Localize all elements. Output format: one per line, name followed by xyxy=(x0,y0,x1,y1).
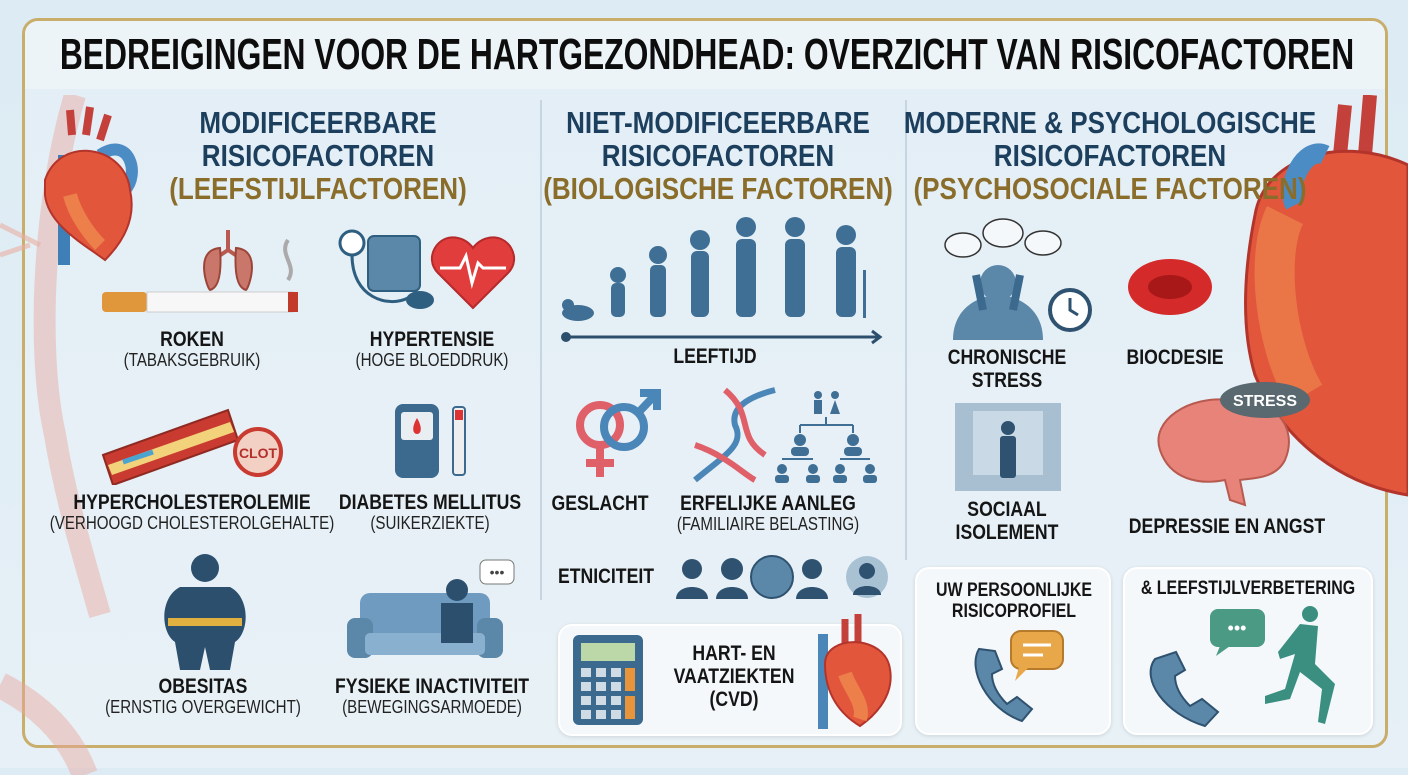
label: hart- en vaatziekten: HART- EN xyxy=(692,642,776,665)
icon: brain with stress cloud xyxy=(1157,382,1310,506)
icon: ethnicity heads xyxy=(676,555,888,599)
label: uw persoonlijke risicoprofiel: UW PERSOONLIJKE xyxy=(936,580,1092,601)
column 1 heading: (LEEFSTIJLFACTOREN) xyxy=(169,171,467,206)
label: sociaal isolement xyxy=(956,498,1058,544)
icon: phone and bubble xyxy=(974,630,1064,722)
icon: blood cell xyxy=(1128,259,1212,315)
icon: artery with clot xyxy=(102,408,283,485)
label: obesitas: (ERNSTIG OVERGEWICHT) xyxy=(105,697,301,717)
icon: couch: ••• xyxy=(490,564,504,580)
column 2 heading: (BIOLOGISCHE FACTOREN) xyxy=(543,171,893,206)
panel: leefstijlverbetering xyxy=(1123,567,1373,735)
label: roken xyxy=(124,328,260,370)
icon: phone, chat and runner xyxy=(1150,606,1335,728)
label: hypercholesterolemie: (VERHOOGD CHOLESTEROLGEHALTE) xyxy=(50,513,334,533)
icon: brain with stress cloud: STRESS xyxy=(1233,393,1297,410)
label: hart- en vaatziekten: (CVD) xyxy=(710,688,758,711)
icon: calculator xyxy=(573,635,643,725)
label: etniciteit: ETNICITEIT xyxy=(558,565,654,588)
icon: stress head xyxy=(944,218,1092,340)
decoration: right heart xyxy=(1244,95,1408,496)
label: hart- en vaatziekten xyxy=(674,642,794,711)
label: diabetes: (SUIKERZIEKTE) xyxy=(370,513,490,533)
icon: obese person xyxy=(164,554,246,670)
label: chronische stress: CHRONISCHE xyxy=(948,346,1066,369)
label: hypertensie: (HOGE BLOEDDRUK) xyxy=(356,350,508,370)
panel: cvd calculator xyxy=(558,624,902,736)
label: sociaal isolement: SOCIAAL xyxy=(967,498,1047,521)
label: uw persoonlijke risicoprofiel: RISICOPROFIEL xyxy=(952,601,1076,622)
label: hypertensie: HYPERTENSIE xyxy=(370,328,494,351)
icon: social isolation room xyxy=(955,403,1061,491)
icon: age progression xyxy=(561,217,882,344)
label: diabetes: DIABETES MELLITUS xyxy=(339,491,521,514)
label: uw persoonlijke risicoprofiel xyxy=(936,580,1092,622)
label: hart- en vaatziekten: VAATZIEKTEN xyxy=(674,665,794,688)
column dividers xyxy=(540,100,542,600)
column 2 heading: NIET-MODIFICEERBARE xyxy=(566,105,870,140)
label: erfelijke aanleg: (FAMILIAIRE BELASTING) xyxy=(677,514,859,534)
label: roken: (TABAKSGEBRUIK) xyxy=(124,350,260,370)
label: biocdesie: BIOCDESIE xyxy=(1126,346,1224,369)
column 3 heading: MODERNE & PSYCHOLOGISCHE xyxy=(904,105,1316,140)
icon: glucose meter xyxy=(395,404,466,478)
column 1 heading xyxy=(169,105,467,206)
label: obesitas xyxy=(105,675,301,717)
label: hypertensie xyxy=(356,328,508,370)
label: obesitas: OBESITAS xyxy=(159,675,247,698)
icon: blood pressure and heart xyxy=(338,230,516,310)
column 2 heading: RISICOFACTOREN xyxy=(602,138,834,173)
label: roken: ROKEN xyxy=(160,328,224,351)
label: fysieke inactiviteit: FYSIEKE INACTIVITEIT xyxy=(335,675,529,698)
icon: dna and family tree xyxy=(693,387,877,483)
column 2 heading xyxy=(543,105,893,206)
label: fysieke inactiviteit xyxy=(335,675,529,717)
title band xyxy=(25,21,1385,89)
icon: couch xyxy=(347,560,514,658)
label: erfelijke aanleg: ERFELIJKE AANLEG xyxy=(680,492,856,515)
label: diabetes xyxy=(339,491,521,533)
label: hypercholesterolemie xyxy=(50,491,334,533)
panel: persoonlijke risicoprofiel xyxy=(915,567,1111,735)
icon: gender symbols xyxy=(576,389,661,477)
label: erfelijke aanleg xyxy=(677,492,859,534)
title: BEDREIGINGEN VOOR DE HARTGEZONDHEAD: OVERZICHT VAN RISICOFACTOREN xyxy=(60,30,1354,79)
decoration: left heart and vessel xyxy=(0,95,138,775)
icon: phone, chat and runner: ••• xyxy=(1228,618,1246,638)
label: leefstijlverbetering: & LEEFSTIJLVERBETERING xyxy=(1141,578,1355,599)
column 3 heading xyxy=(904,105,1316,206)
label: leeftijd: LEEFTIJD xyxy=(673,345,757,368)
label: depressie en angst: DEPRESSIE EN ANGST xyxy=(1129,515,1325,538)
label: fysieke inactiviteit: (BEWEGINGSARMOEDE) xyxy=(342,697,522,717)
icon: heart xyxy=(818,614,892,729)
column 3 heading: (PSYCHOSOCIALE FACTOREN) xyxy=(913,171,1307,206)
label: geslacht: GESLACHT xyxy=(551,492,649,515)
label: chronische stress xyxy=(948,346,1066,392)
label: hypercholesterolemie: HYPERCHOLESTEROLEMIE xyxy=(73,491,311,514)
column 1 heading: MODIFICEERBARE xyxy=(199,105,437,140)
column 3 heading: RISICOFACTOREN xyxy=(994,138,1226,173)
label: chronische stress: STRESS xyxy=(972,369,1042,392)
label: sociaal isolement: ISOLEMENT xyxy=(956,521,1058,544)
column 1 heading: RISICOFACTOREN xyxy=(202,138,434,173)
icon: lungs and cigarette xyxy=(102,230,298,312)
icon: artery with clot: CLOT xyxy=(239,445,277,461)
